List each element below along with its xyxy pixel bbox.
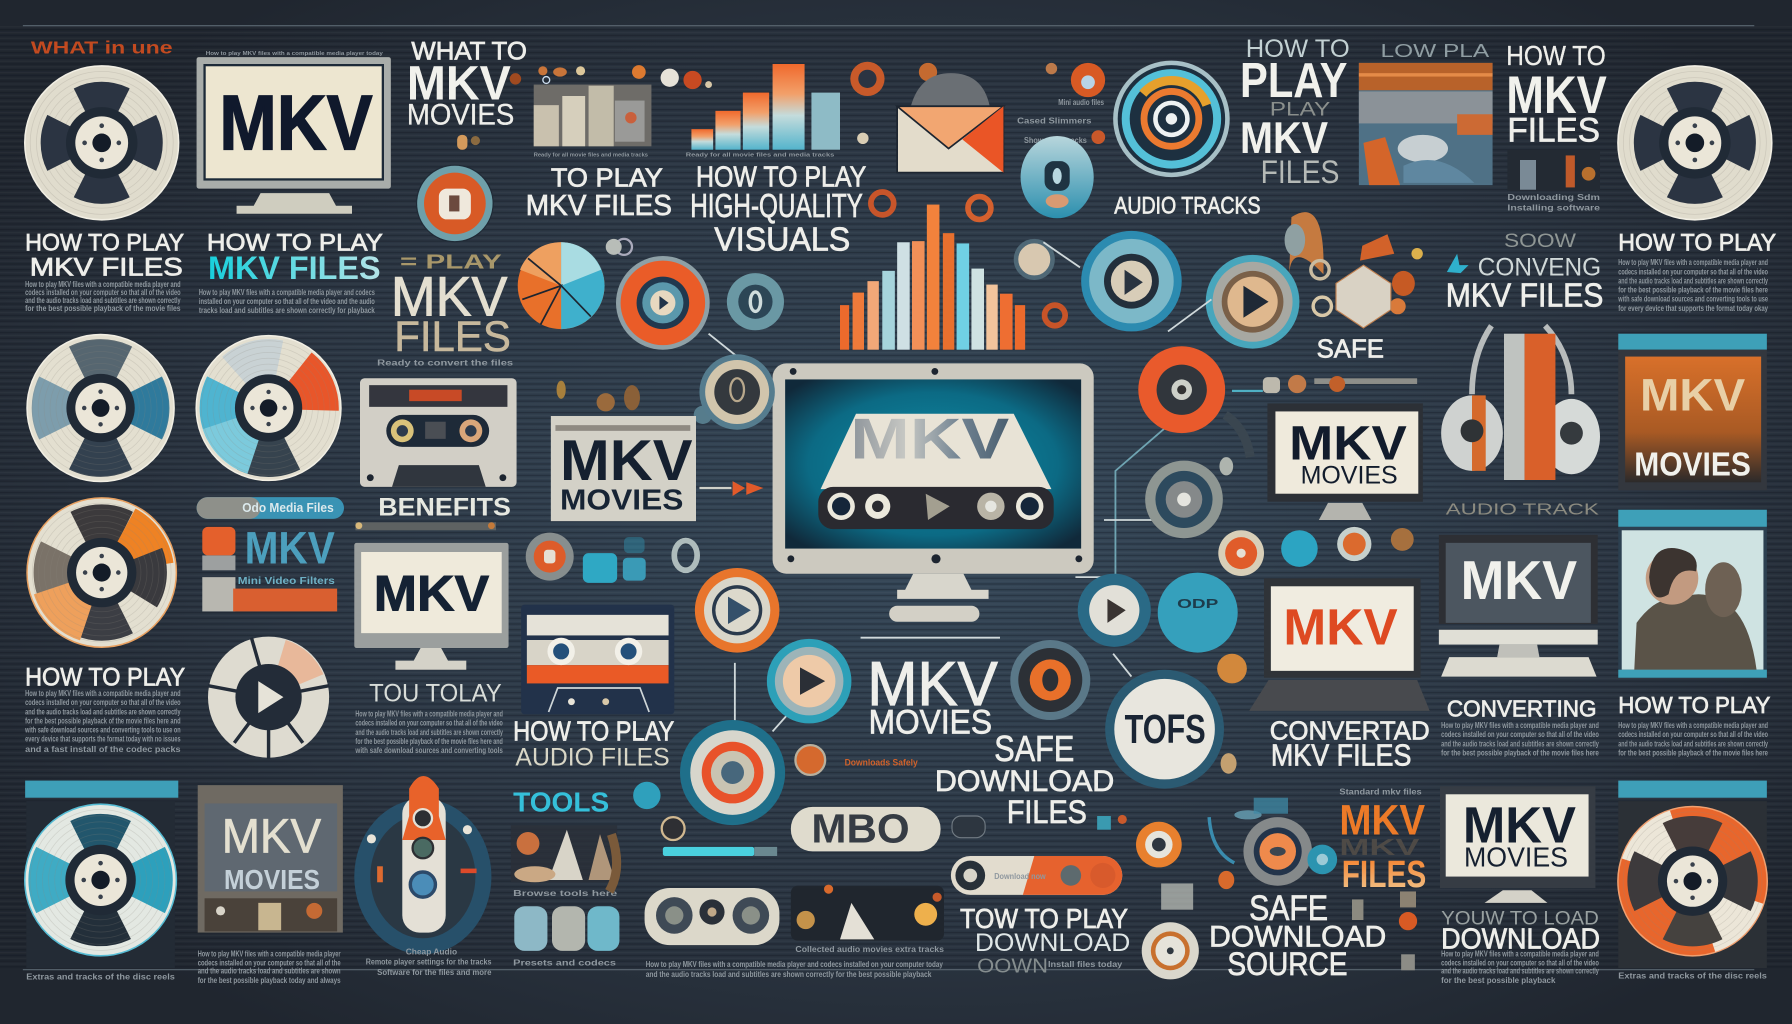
photo: tools collage [511, 825, 617, 882]
small text: Show more tracks [1024, 135, 1087, 145]
pill label: Odo Media Files [242, 501, 334, 515]
text block [646, 944, 944, 979]
text block: and the audio tracks load and subtitles are shown [198, 966, 341, 976]
icons: tool squares: Presets and codecs [513, 958, 616, 968]
icon: small pie chart [518, 242, 605, 329]
monitor: red MKV: MKV [1283, 598, 1398, 656]
text block: How to play MKV files with a compatible media player and [25, 688, 181, 698]
icon: hexagon [1336, 265, 1391, 328]
heading: how to play audio files: HOW TO PLAY [513, 716, 674, 747]
heading: how to play mkv files: MKV FILES [30, 253, 183, 281]
icons: tool squares [513, 906, 619, 968]
text block: with safe download sources and converting tools [355, 745, 503, 755]
text block: for the best possible playback of the movie files [25, 303, 181, 313]
heading: play mkv files: MKV [391, 264, 508, 327]
bar: cyan slider [663, 847, 777, 856]
heading: orange MKV files: FILES [1342, 853, 1426, 895]
heading: how to mkv files right [1506, 40, 1607, 150]
icon: game controller [645, 888, 779, 945]
heading: cyan mkv files [207, 229, 383, 286]
decoration: orange markers [632, 62, 1105, 144]
chart: center equalizer bars [840, 205, 1025, 350]
heading: how to load download: DOWNLOAD [1441, 924, 1600, 956]
MKV blue tile [202, 522, 337, 611]
text block: and the audio tracks load and subtitles are shown correctly [25, 706, 181, 716]
text block: for the best possible playback [1441, 975, 1556, 985]
icon: orange ring center [1010, 640, 1090, 720]
button icons mid left [526, 381, 712, 583]
MKV blue tile: Mini Video Filters [238, 576, 335, 587]
monitor: central hero [773, 363, 1094, 622]
heading: tow to play download: TOW TO PLAY [960, 903, 1128, 934]
icons: small rust rings [606, 192, 1065, 326]
heading: to play mkv files [526, 162, 672, 222]
section: top-left reel: WHAT in une [31, 38, 173, 58]
text line: top: How to play MKV files with a compatible media player today [206, 51, 384, 57]
heading: how to play mkv files [25, 229, 184, 281]
icon: remote [354, 776, 491, 954]
heading: how to play high-quality visuals: VISUALS [714, 221, 850, 258]
text block [355, 709, 503, 755]
icon: orange play ring [616, 256, 710, 350]
icon: teal sphere [1021, 136, 1094, 218]
poster: MKV movies [1618, 334, 1767, 490]
reel poster: orange [1616, 781, 1769, 980]
heading: cyan mkv files: HOW TO PLAY [207, 229, 383, 256]
icon: teal ring [727, 273, 784, 330]
small text: Mini audio files [1058, 98, 1104, 107]
connector lines [709, 242, 1211, 731]
heading: safe download source [1209, 888, 1386, 982]
heading: safe: SAFE [1317, 334, 1384, 364]
heading: how to load download [1441, 908, 1600, 956]
icon: film reel right [1618, 66, 1772, 220]
text block [366, 946, 492, 977]
heading: how to play low: MKV [1240, 114, 1328, 163]
reel poster: teal [25, 781, 178, 981]
heading: how to mkv files right: FILES [1507, 112, 1600, 150]
heading: tools: TOOLS [513, 786, 609, 817]
heading: to play mkv files: MKV FILES [526, 190, 672, 222]
reel: teal and orange [196, 333, 346, 480]
icon: speaker [1243, 817, 1337, 886]
icon: film reel teal [25, 804, 176, 956]
text block: and the audio tracks load and subtitles are shown correctly [25, 295, 181, 305]
text block: Software for the files and more [377, 967, 492, 977]
text block: codecs installed on your computer so that all of the video [25, 287, 181, 297]
decoration: safe row [1232, 375, 1417, 393]
heading: safe download source: SOURCE [1227, 946, 1347, 982]
photo: scene panel [1359, 40, 1493, 185]
heading: how to play high-quality visuals: HIGH-QUALITY [690, 188, 863, 225]
heading: safe download files: SAFE [994, 728, 1074, 769]
icon: headphones [1441, 326, 1600, 480]
device: media box [818, 407, 1054, 529]
text block: codecs installed on your computer so that all of the video [1441, 958, 1599, 968]
heading: how to play high-quality visuals [690, 161, 866, 258]
heading: MKV movies center: MOVIES [869, 704, 992, 742]
text block: installed on your computer so that all of the video and the audio [199, 296, 375, 306]
MKV blue tile: MKV [245, 522, 335, 573]
heading: how to play low: HOW TO [1246, 35, 1350, 63]
photo: scene panel: LOW PLA [1381, 40, 1490, 61]
icons: small rings lower [609, 782, 1182, 891]
heading: how to play lower left: HOW TO PLAY [25, 664, 185, 692]
monitor: MKV: MKV [219, 81, 373, 167]
monitor: MKV small: MKV [374, 564, 490, 621]
heading: converting mkv files top: SOOW [1504, 230, 1577, 252]
play wheel [208, 637, 329, 759]
heading: safe download files: DOWNLOAD [935, 765, 1114, 798]
text block [1441, 720, 1599, 757]
heading: tow to play download: Install files today [1048, 959, 1123, 969]
poster: MKV movies: MOVIES [1634, 446, 1751, 483]
monitor: gray MKV [1439, 535, 1598, 677]
icon: tan play ring [1206, 255, 1299, 349]
small text: Cased Slimmers [1017, 115, 1092, 125]
label: MKV movies card [551, 416, 696, 521]
device: media box: MKV [850, 407, 1009, 471]
monitor: MKV movies right [1267, 403, 1423, 520]
reel poster: teal: Extras and tracks of the disc reels [26, 971, 175, 981]
reel: orange gray [27, 498, 180, 647]
monitor: red MKV [1249, 578, 1430, 711]
heading: orange MKV files [1339, 786, 1426, 895]
text block: Collected audio movies extra tracks [795, 944, 944, 954]
heading: tou tolay: TOU TOLAY [369, 680, 502, 708]
monitor: MKV movies right: MKV [1289, 417, 1407, 470]
heading: converting mkv files top [1446, 230, 1603, 314]
heading: tow to play download: OOWN [977, 955, 1048, 978]
pill label [197, 497, 344, 519]
arrow: orange [699, 481, 763, 496]
text block: codecs installed on your computer so that all of the [198, 958, 341, 968]
decoration: small icons top left: Ready for all movie files and media tracks [534, 153, 648, 159]
heading: how to play low [1240, 35, 1350, 190]
text block: codecs installed on your computer so that all of the video [355, 718, 503, 728]
text block: every device that supports the format today with no issues [25, 734, 181, 744]
icon: TOFS badge: TOFS [1125, 706, 1206, 752]
section: top-left reel [25, 38, 179, 220]
heading: play mkv files: FILES [394, 313, 511, 360]
heading: how to play audio files: AUDIO FILES [515, 744, 670, 772]
label: MKV movies card: MOVIES [560, 485, 683, 517]
icon: small orange node [795, 745, 919, 775]
text block: for the best possible playback today and always [198, 975, 341, 985]
icon: teal sphere right: ODP [1177, 597, 1218, 611]
cassette: retro [521, 605, 674, 714]
icon: blue play right [1078, 574, 1151, 647]
heading: orange MKV files: Standard mkv files [1339, 786, 1422, 796]
heading: to play mkv files: TO PLAY [551, 162, 663, 192]
heading: what to mkv movies: WHAT TO [411, 37, 527, 65]
text block: for the best possible playback of the movie files here and [355, 736, 503, 746]
poster: MKV movies: MKV [1640, 369, 1746, 420]
decoration: lower right bits [1161, 654, 1288, 910]
pill: MBO: MBO [811, 805, 910, 851]
text block [198, 949, 341, 985]
icons: small row right [1218, 415, 1414, 576]
text block: codecs installed on your computer so that all of the video [1441, 729, 1599, 739]
heading: audio tracks: AUDIO TRACKS [1114, 193, 1261, 220]
icon: orange button [416, 165, 494, 242]
photo: small collage [1507, 150, 1600, 212]
panel: MKV movies grey: MKV [222, 811, 321, 864]
icon: cream ring [1142, 922, 1199, 979]
text block: and the audio tracks load and subtitles are shown correctly for the best possible playback [646, 969, 932, 979]
heading: safe download source: SAFE [1249, 888, 1328, 928]
pill: orange slider: Download now [994, 871, 1046, 881]
text block: and the audio tracks load and subtitles are shown correctly [1441, 738, 1599, 748]
heading: MKV movies center: MKV [867, 650, 998, 719]
photo: dark collage [791, 885, 944, 941]
icon: bullseye lower [680, 720, 785, 825]
text block: How to play MKV files with a compatible media player and codecs installed on your computer today [646, 959, 943, 969]
heading: safe download source: DOWNLOAD [1209, 920, 1386, 953]
heading: how to play low: FILES [1261, 154, 1339, 190]
text block: How to play MKV files with a compatible media player and codecs [199, 287, 375, 297]
text block: Cheap Audio [406, 946, 457, 956]
text block: and the audio tracks load and subtitles are shown correctly [1441, 966, 1599, 976]
icon: blue play ring [1081, 231, 1182, 331]
heading: how to load download: YOUW TO LOAD [1441, 908, 1599, 930]
icon: right gray ring [1145, 461, 1223, 538]
heading: tow to play download: DOWNLOAD [975, 929, 1130, 957]
heading: how to mkv files right: HOW TO [1506, 40, 1606, 71]
text block: Remote player settings for the tracks [366, 957, 492, 967]
heading: play mkv files: = PLAY [400, 251, 502, 274]
heading: converting mkv files top: CONVENG [1478, 253, 1601, 281]
poster: photo [1618, 510, 1767, 678]
icon: teal sphere right [1158, 573, 1238, 653]
monitor: MKV [197, 57, 391, 214]
decoration: orange clusters [1232, 212, 1423, 315]
decoration: small icons top left [457, 66, 648, 159]
icon: film reel orange [1616, 805, 1769, 958]
text line: Browse tools here [513, 888, 617, 898]
heading: converted mkv files [1270, 715, 1430, 773]
text block [24, 688, 181, 754]
heading: how to play poster: HOW TO PLAY [1618, 692, 1770, 718]
heading and text: how to play right: HOW TO PLAY [1618, 229, 1776, 256]
photo: boxes [534, 85, 651, 146]
icon: film reel cream [25, 66, 179, 220]
pill: orange slider [951, 856, 1122, 895]
monitor: MKV small [354, 543, 509, 670]
heading: play mkv files [391, 251, 511, 360]
panel: MKV movies grey [198, 785, 343, 933]
text block: and the audio tracks load and subtitles are shown correctly [355, 727, 503, 737]
text block [199, 287, 375, 315]
heading: how to play low: PLAY [1240, 54, 1347, 108]
icon: teal play lower [767, 639, 851, 723]
photo: small collage: Downloading Sdm [1507, 192, 1600, 202]
chart: top bar chart [691, 64, 840, 150]
icon: small orange node: Downloads Safely [845, 758, 919, 768]
photo: small collage: Installing software [1507, 202, 1600, 212]
text block [1441, 949, 1599, 985]
text block: for the best possible playback of the movie files here and [25, 715, 181, 725]
panel: MKV movies grey: MOVIES [224, 864, 320, 895]
heading: tow to play download [960, 903, 1130, 978]
decoration: source side [1352, 891, 1417, 970]
reel: blue gray [27, 334, 174, 482]
heading: how to play mkv files: HOW TO PLAY [25, 229, 184, 256]
monitor: MKV movies right: MOVIES [1301, 461, 1398, 489]
heading: converted mkv files: CONVERTAD [1270, 715, 1430, 745]
pill: MBO [791, 805, 941, 851]
heading: how to play low: PLAY [1270, 98, 1330, 120]
text block: with safe download sources and converting tools to use on [24, 725, 181, 735]
heading: converting: CONVERTING [1447, 696, 1597, 722]
text line: AUDIO TRACK [1446, 501, 1599, 518]
heading: orange MKV files: MKV [1339, 834, 1421, 860]
heading: converted mkv files: MKV FILES [1271, 738, 1411, 773]
monitor: gray MKV: MKV [1461, 549, 1578, 611]
text block: How to play MKV files with a compatible media player and [1441, 949, 1599, 959]
label: MKV movies card: MKV [560, 429, 693, 493]
heading: how to play high-quality visuals: HOW TO PLAY [696, 161, 866, 193]
text block: tracks load and subtitles are shown correctly for playback [199, 305, 375, 315]
text block: for the best possible playback of the movie files here [1441, 747, 1599, 757]
heading: safe download files: FILES [1007, 794, 1087, 830]
heading: safe download files [935, 728, 1114, 830]
heading: orange MKV files: MKV [1339, 796, 1425, 843]
text line: Ready to convert the files [377, 358, 513, 368]
heading: cyan mkv files: MKV FILES [208, 250, 381, 286]
cassette tape [360, 378, 517, 487]
icon: right orange ring [1138, 346, 1225, 433]
heading and text: how to play right [1618, 229, 1776, 313]
small text [1017, 98, 1104, 145]
icon: TOFS badge [1105, 670, 1224, 789]
text line [355, 522, 496, 530]
text block [1618, 720, 1768, 757]
heading: benefits: BENEFITS [378, 493, 511, 521]
heading: what to mkv movies: MOVIES [407, 99, 514, 132]
text block: and a fast install of the codec packs [25, 744, 181, 754]
heading: what to mkv movies [407, 37, 527, 132]
heading: converting mkv files top: MKV FILES [1446, 277, 1603, 314]
icon: envelope [897, 73, 1003, 173]
icon: big teal play [695, 568, 779, 653]
text block [25, 279, 181, 313]
text block: How to play MKV files with a compatible media player and [355, 709, 503, 719]
heading: how to play audio files [513, 716, 674, 772]
monitor: MKV movies lower: MKV [1463, 795, 1576, 853]
text block: How to play MKV files with a compatible media player and [1441, 720, 1599, 730]
monitor: MKV movies lower: MOVIES [1464, 841, 1568, 872]
text line: under bars: Ready for all movie files and media tracks [686, 153, 834, 159]
heading: how to mkv files right: MKV [1506, 66, 1607, 125]
text block: How to play MKV files with a compatible media player and [25, 279, 181, 289]
heading: what to mkv movies: MKV [407, 57, 511, 110]
text block: codecs installed on your computer so that all of the video [25, 697, 181, 707]
reel poster: orange: Extras and tracks of the disc reels [1618, 970, 1767, 980]
icon: target rings [1115, 63, 1227, 175]
icons: around left column [699, 354, 775, 430]
monitor: MKV movies lower [1440, 786, 1595, 903]
text block: How to play MKV files with a compatible media player [198, 949, 341, 959]
